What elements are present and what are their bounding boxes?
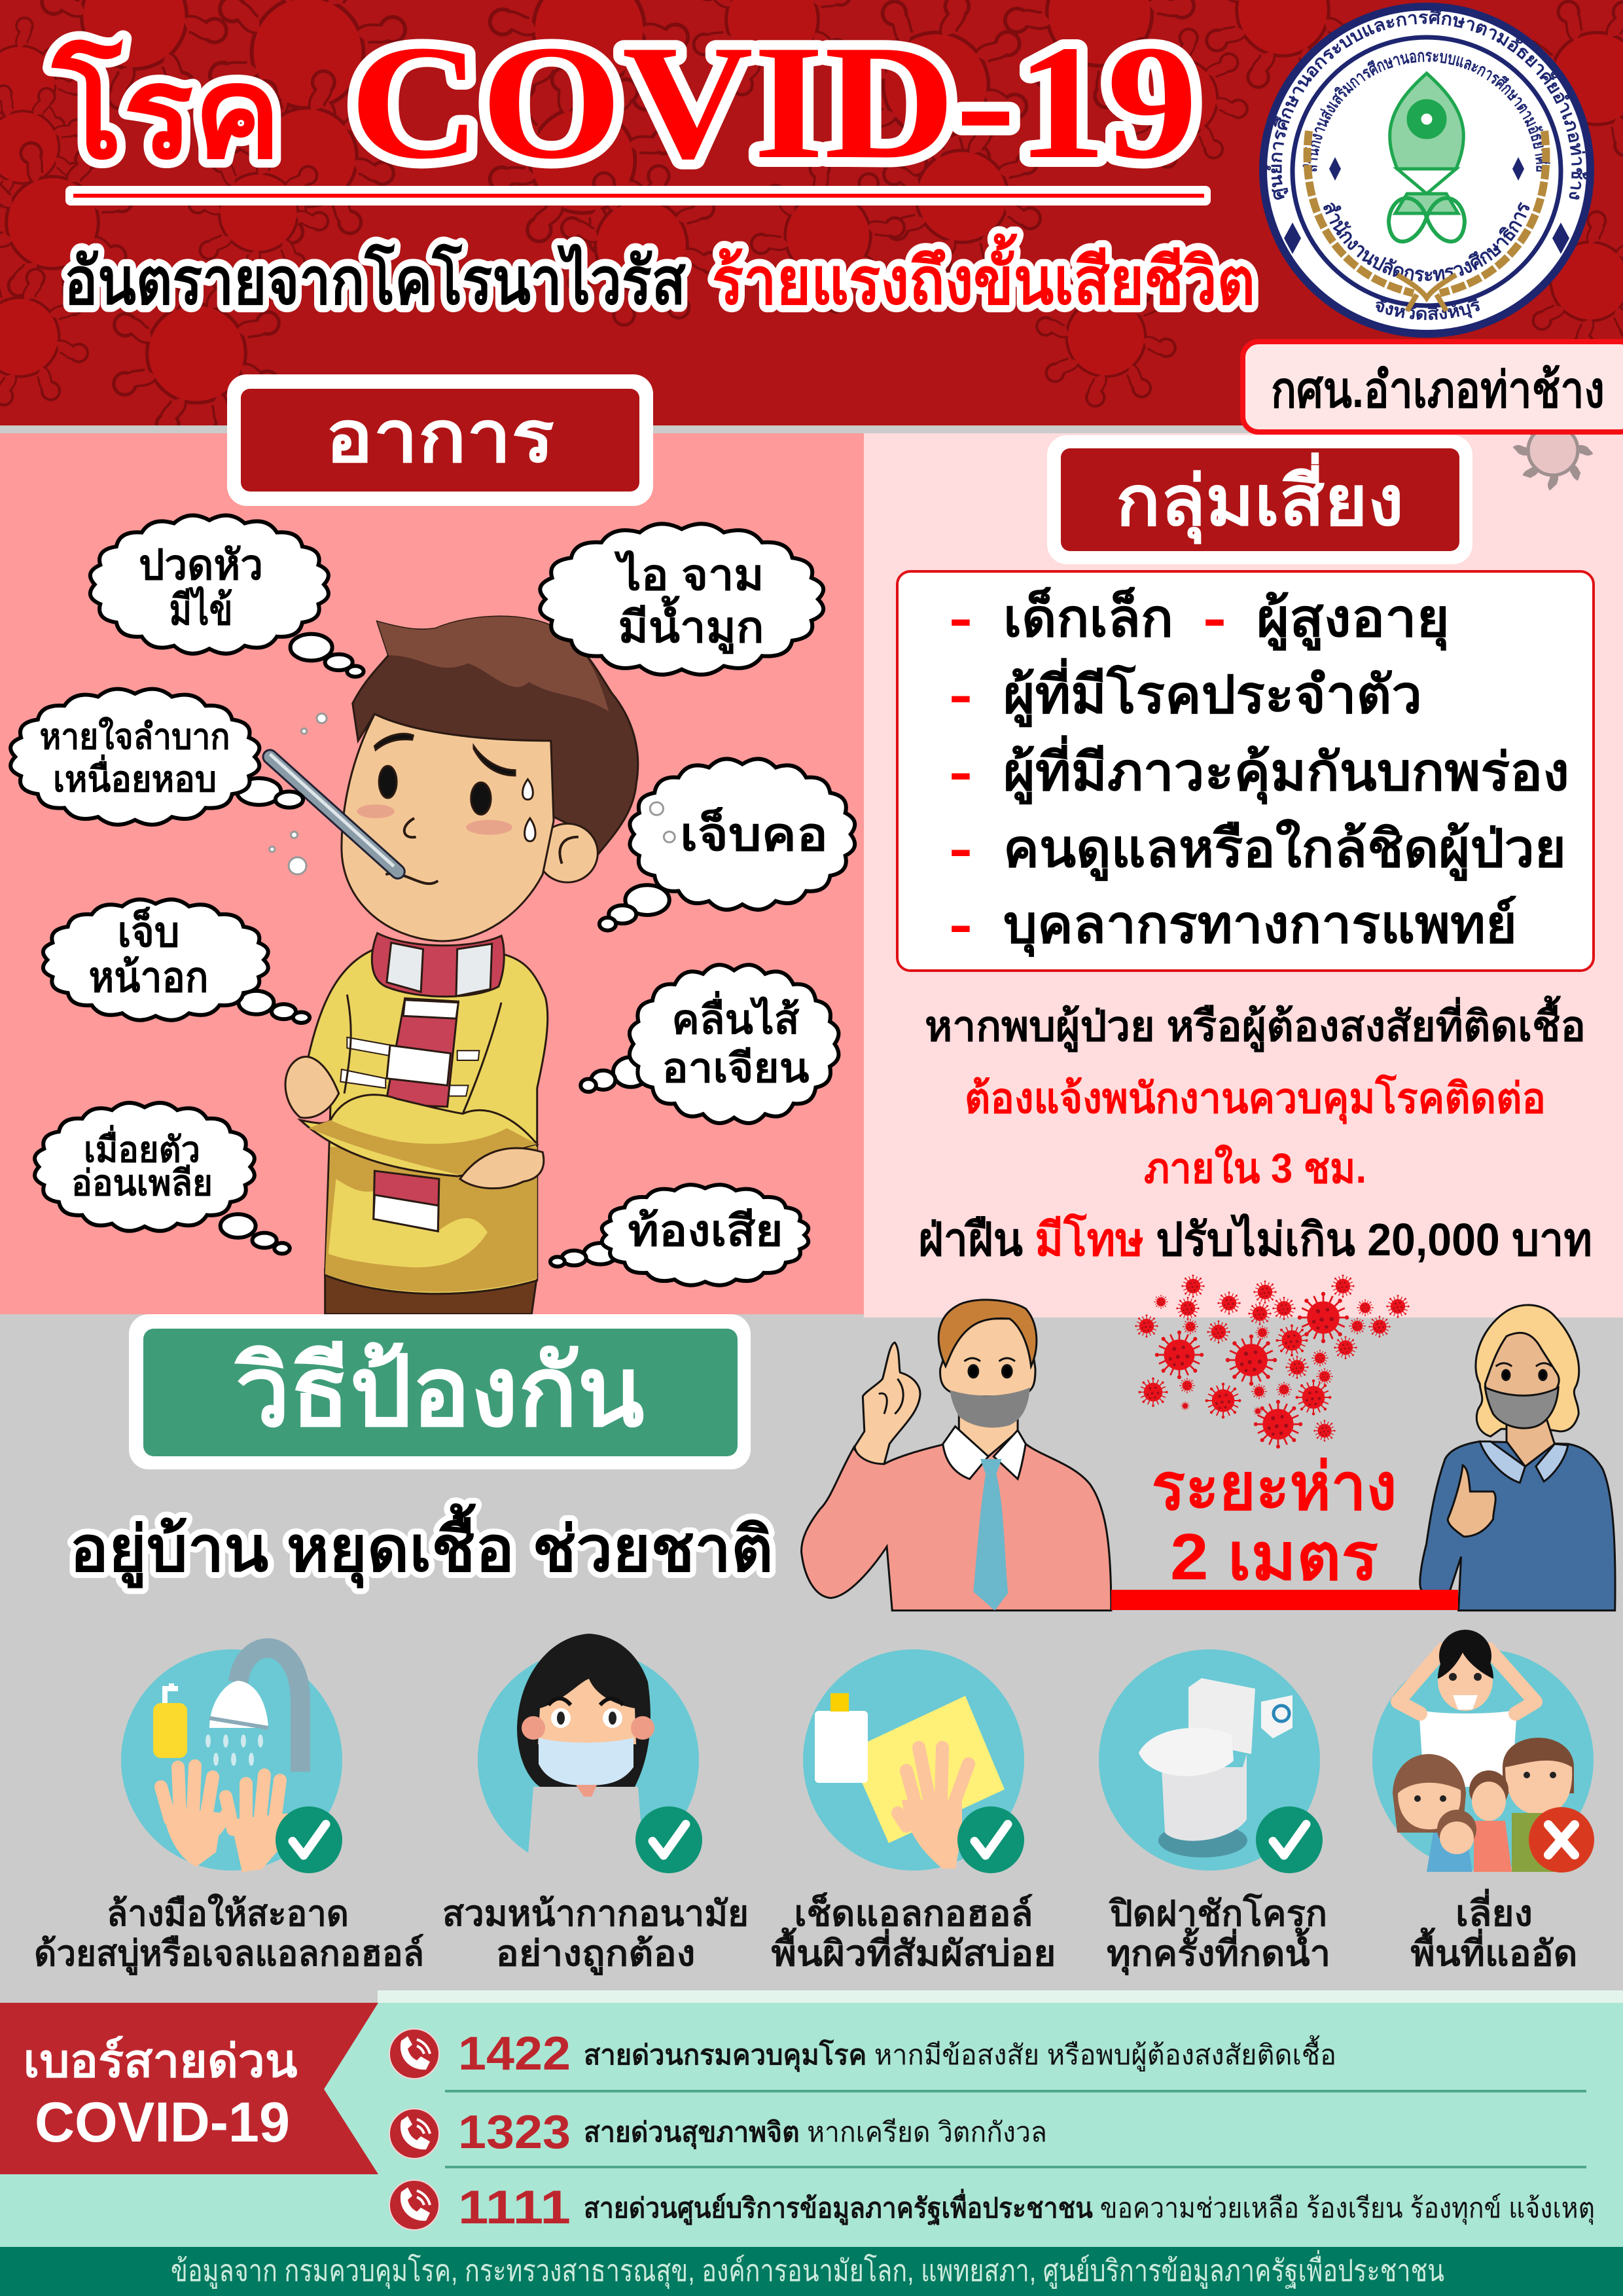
trousers	[325, 1270, 537, 1314]
icon: face mask	[478, 1634, 702, 1873]
cloud labels	[39, 541, 828, 1255]
prevention captions	[34, 1888, 1577, 1976]
hotline 1422: สายด่วนกรมควบคุมโรค หากมีข้อสงสัย หรือพบผู้ต้องสงสัยติดเชื้อ	[584, 2035, 1336, 2072]
scarf	[372, 933, 504, 1231]
panel: risk group list: บุคลากรทางการแพทย์	[1003, 895, 1517, 958]
thought clouds	[10, 515, 855, 1285]
prevention captions: ล้างมือให้สะอาด	[107, 1893, 349, 1933]
logo: agency seal	[1259, 3, 1594, 338]
cloud labels: หายใจลำบาก	[39, 716, 230, 757]
cloud labels: เจ็บคอ	[680, 806, 828, 860]
subtitle: ร้ายแรงถึงขั้นเสียชีวิต	[712, 233, 1255, 318]
cloud labels: ไอ จาม	[614, 550, 764, 599]
hotline 1111	[389, 2180, 1595, 2234]
title	[51, 12, 1198, 193]
panel: risk group list: ผู้สูงอายุ	[1257, 589, 1450, 651]
logo: agency seal: สำนักงานส่งเสริมการศึกษานอกระบบและการศึกษาตามอัธยาศัย	[1302, 52, 1550, 171]
hair	[353, 617, 638, 858]
cloud labels: คลื่นไส้	[671, 991, 800, 1043]
panel: risk group list: -	[949, 666, 972, 724]
title divider	[65, 186, 1211, 206]
logo: agency seal: สำนักงานปลัดกระทรวงศึกษาธิการ	[1323, 202, 1530, 281]
heading: risk groups	[1047, 435, 1472, 564]
panel: risk groups background	[864, 433, 1623, 1318]
slogan: อยู่บ้าน หยุดเชื้อ ช่วยชาติ	[69, 1503, 774, 1588]
panel: risk group list: เด็กเล็ก	[1003, 586, 1173, 647]
cloud labels: มีน้ำมูก	[618, 595, 764, 655]
hotline 1111: 1111	[458, 2181, 571, 2234]
small grey virus	[1516, 413, 1590, 488]
illustration: sick man	[270, 617, 638, 1314]
hotline 1323	[389, 2106, 1047, 2159]
icon: wiping surface	[803, 1649, 1024, 1873]
distance bar	[1111, 1590, 1458, 1610]
crossed arm and hands	[285, 1057, 544, 1189]
heading: prevention: วิธีป้องกัน	[234, 1336, 645, 1446]
prevention captions: เช็ดแอลกอฮอล์	[794, 1893, 1033, 1933]
illustration: man in mask	[801, 1300, 1111, 1611]
cloud tails	[221, 634, 669, 1266]
text block: reporting notice: ฝ่าฝืน มีโทษ ปรับไม่เกิน 20,000 บาท	[918, 1213, 1592, 1265]
logo: agency seal: ศูนย์การศึกษานอกระบบและการศึกษาตามอัธยาศัยอำเภอท่าช้าง	[1267, 10, 1586, 200]
text block: reporting notice: ภายใน 3 ชม.	[1144, 1144, 1366, 1192]
logo: agency seal: จังหวัดสิงห์บุรี	[1376, 298, 1480, 320]
prevention captions: ปิดฝาชักโครก	[1109, 1893, 1327, 1933]
prevention captions: ทุกครั้งที่กดน้ำ	[1107, 1928, 1330, 1976]
panel: prevention background	[0, 1314, 1623, 1990]
office name label	[1243, 342, 1623, 432]
panel: risk group list: -	[949, 819, 972, 878]
sweater	[308, 949, 548, 1294]
hotline 1111: สายด่วนศูนย์บริการข้อมูลภาครัฐเพื่อประชาชน ขอความช่วยเหลือ ร้องเรียน ร้องทุกข์ แจ้งเหตุ	[584, 2189, 1595, 2226]
cloud labels: เมื่อยตัว	[84, 1124, 200, 1170]
prevention captions: สวมหน้ากากอนามัย	[442, 1894, 749, 1933]
icon: toilet	[1099, 1649, 1323, 1873]
heading: symptoms: อาการ	[325, 397, 554, 477]
text block: reporting notice: ต้องแจ้งพนักงานควบคุมโรคติดต่อ	[965, 1073, 1546, 1124]
icon: crowded space	[1372, 1630, 1594, 1873]
panel: risk group list: คนดูแลหรือใกล้ชิดผู้ป่วย	[1003, 818, 1566, 882]
hotline banner: เบอร์สายด่วน	[24, 2036, 298, 2087]
heading: symptoms	[227, 374, 653, 506]
text block: reporting notice	[918, 996, 1592, 1265]
panel: symptoms background	[0, 433, 864, 1314]
distance label	[1152, 1450, 1397, 1594]
cloud labels: ท้องเสีย	[628, 1206, 783, 1255]
prevention captions: พื้นที่แออัด	[1411, 1928, 1577, 1973]
hotline banner	[0, 2003, 378, 2174]
hotline 1323: สายด่วนสุขภาพจิต หากเครียด วิตกกังวล	[584, 2117, 1047, 2149]
icon: hand washing	[121, 1648, 342, 1873]
cloud labels: อาเจียน	[662, 1046, 809, 1091]
prevention captions: ด้วยสบู่หรือเจลแอลกอฮอล์	[34, 1933, 424, 1975]
distance label: ระยะห่าง	[1152, 1450, 1397, 1524]
prevention captions: พื้นผิวที่สัมผัสบ่อย	[771, 1928, 1056, 1973]
hotline 1323: 1323	[458, 2106, 571, 2159]
cloud labels: เหนื่อยหอบ	[53, 754, 217, 799]
panel: risk group list	[897, 571, 1594, 971]
heading: prevention	[129, 1314, 751, 1469]
cloud labels: มีไข้	[169, 586, 233, 634]
panel: risk group list: -	[949, 743, 972, 801]
cloud bodies	[10, 515, 855, 1285]
title: COVID-19	[349, 12, 1198, 193]
cloud labels: ปวดหัว	[139, 541, 263, 588]
cloud labels: อ่อนเพลีย	[71, 1164, 213, 1203]
subtitle: อันตรายจากโคโรนาไวรัส	[64, 243, 686, 318]
hotline 1422	[389, 2028, 1336, 2080]
panel: risk group list: -	[1203, 589, 1226, 647]
cloud labels: หน้าอก	[89, 954, 208, 1001]
thermometer	[270, 754, 398, 872]
text block: reporting notice: หากพบผู้ป่วย หรือผู้ต้องสงสัยที่ติดเชื้อ	[925, 996, 1586, 1052]
face	[342, 714, 597, 941]
footer source bar	[0, 2247, 1623, 2296]
title: โรค	[51, 39, 281, 185]
illustration: woman in mask	[1420, 1305, 1615, 1611]
panel: risk group list: ผู้ที่มีโรคประจำตัว	[1003, 658, 1422, 728]
virus cluster	[1135, 1274, 1410, 1448]
breath bubbles	[270, 713, 327, 874]
distance label: 2 เมตร	[1170, 1520, 1378, 1594]
panel: hotline band	[0, 1990, 1623, 2247]
header band	[0, 0, 1623, 470]
hotline 1422: 1422	[458, 2028, 571, 2080]
subtitle	[64, 233, 1255, 318]
cloud labels: เจ็บ	[118, 907, 179, 956]
panel: risk group list: ผู้ที่มีภาวะคุ้มกันบกพร่อง	[1003, 735, 1569, 805]
prevention captions: อย่างถูกต้อง	[496, 1934, 695, 1975]
panel: risk group list: -	[949, 895, 972, 954]
prevention captions: เลี่ยง	[1455, 1888, 1533, 1933]
heading: risk groups: กลุ่มเสี่ยง	[1116, 452, 1404, 545]
panel: risk group list: -	[949, 589, 972, 647]
hotline banner: COVID-19	[35, 2091, 290, 2154]
